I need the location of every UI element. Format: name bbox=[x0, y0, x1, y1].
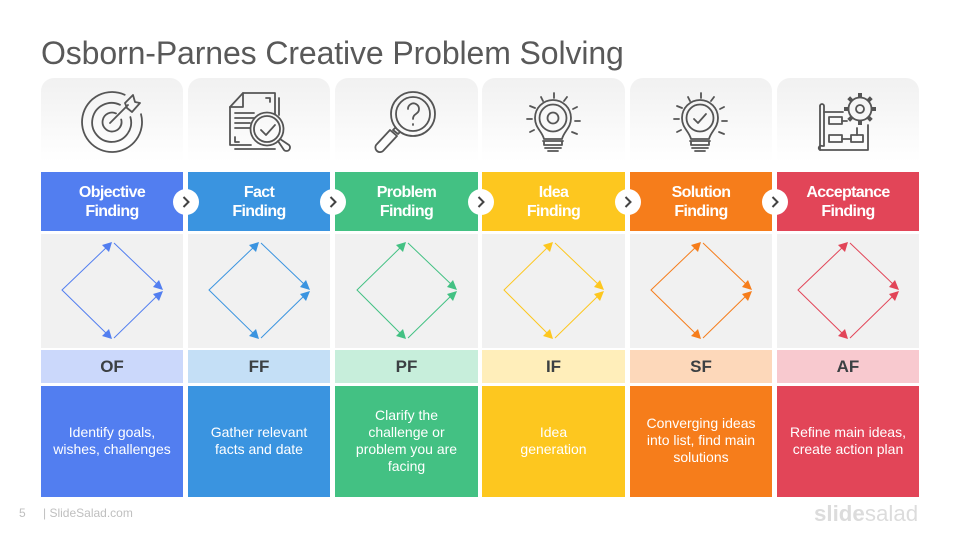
page number: 5 bbox=[19, 506, 26, 520]
text block: problem description: facing bbox=[388, 458, 425, 474]
panel: header solution finding bbox=[630, 172, 772, 231]
panel: header fact finding: Fact bbox=[244, 184, 274, 200]
panel: icon target bbox=[41, 78, 183, 162]
panel: header idea finding: Idea bbox=[539, 184, 568, 200]
panel: header objective finding: Objective bbox=[79, 184, 145, 200]
text block: problem description: problem you are bbox=[356, 440, 457, 456]
text block: acceptance description: create action plan bbox=[793, 440, 903, 456]
label: PF: PF bbox=[396, 357, 417, 376]
panel: header acceptance finding bbox=[777, 172, 919, 231]
icon: chevron 5 bbox=[762, 189, 788, 215]
label: FF bbox=[188, 350, 330, 383]
panel: header problem finding: Finding bbox=[380, 202, 433, 220]
label: AF bbox=[777, 350, 919, 383]
panel: icon idea bulb bbox=[482, 78, 625, 162]
text block: idea description: generation bbox=[520, 440, 587, 456]
text block: solution description: into list, find main bbox=[647, 432, 755, 448]
text block: objective description: Identify goals, bbox=[69, 424, 155, 440]
text block: fact description: facts and date bbox=[215, 440, 303, 456]
label: OF bbox=[41, 350, 183, 383]
panel: header objective finding bbox=[41, 172, 183, 231]
text block: objective description: wishes, challenges bbox=[53, 440, 171, 456]
diagram: problem diamond bbox=[335, 234, 478, 348]
diagram: idea diamond bbox=[482, 234, 625, 348]
text block: problem description: challenge or bbox=[368, 424, 445, 440]
label: IF bbox=[482, 350, 625, 383]
label: FF: FF bbox=[249, 357, 269, 376]
panel: icon solution bulb bbox=[630, 78, 772, 162]
label: SF: SF bbox=[690, 357, 712, 376]
icon: chevron 1 bbox=[173, 189, 199, 215]
panel: header problem finding bbox=[335, 172, 478, 231]
label: AF: AF bbox=[837, 357, 859, 376]
label: IF: IF bbox=[546, 357, 561, 376]
text block: acceptance description: Refine main ideas, bbox=[790, 424, 906, 440]
text block: idea description: Idea bbox=[540, 424, 567, 440]
text block: acceptance description bbox=[777, 386, 919, 497]
diagram: acceptance diamond bbox=[777, 234, 919, 348]
panel: icon question magnifier bbox=[335, 78, 478, 162]
text block: fact description bbox=[188, 386, 330, 497]
logo text: slidesalad bbox=[814, 501, 918, 526]
panel: header fact finding bbox=[188, 172, 330, 231]
text block: idea description bbox=[482, 386, 625, 497]
panel: icon plan gear bbox=[777, 78, 919, 162]
icon: chevron 2 bbox=[320, 189, 346, 215]
panel: header idea finding: Finding bbox=[527, 202, 580, 220]
panel: icon document search bbox=[188, 78, 330, 162]
text block: solution description: Converging ideas bbox=[647, 415, 755, 431]
text block: solution description: solutions bbox=[673, 449, 729, 465]
title: Osborn-Parnes Creative Problem Solving bbox=[41, 35, 624, 71]
text block: objective description bbox=[41, 386, 183, 497]
footer text: | SlideSalad.com bbox=[43, 506, 133, 520]
panel: header objective finding: Finding bbox=[85, 202, 139, 220]
label: SF bbox=[630, 350, 772, 383]
text block: fact description: Gather relevant bbox=[211, 424, 307, 440]
text block: solution description bbox=[630, 386, 772, 497]
panel: header problem finding: Problem bbox=[377, 184, 436, 200]
diagram: fact diamond bbox=[188, 234, 330, 348]
panel: header idea finding bbox=[482, 172, 625, 231]
panel: header acceptance finding: Finding bbox=[821, 202, 875, 220]
text block: problem description bbox=[335, 386, 478, 497]
diagram: solution diamond bbox=[630, 234, 772, 348]
label: PF bbox=[335, 350, 478, 383]
panel: header acceptance finding: Acceptance bbox=[806, 184, 890, 200]
diagram: objective diamond bbox=[41, 234, 183, 348]
panel: header fact finding: Finding bbox=[232, 202, 286, 220]
text block: problem description: Clarify the bbox=[375, 406, 438, 422]
label: OF: OF bbox=[100, 357, 124, 376]
icon: chevron 4 bbox=[615, 189, 641, 215]
panel: header solution finding: Solution bbox=[672, 184, 730, 200]
panel: header solution finding: Finding bbox=[674, 202, 728, 220]
icon: chevron 3 bbox=[468, 189, 494, 215]
